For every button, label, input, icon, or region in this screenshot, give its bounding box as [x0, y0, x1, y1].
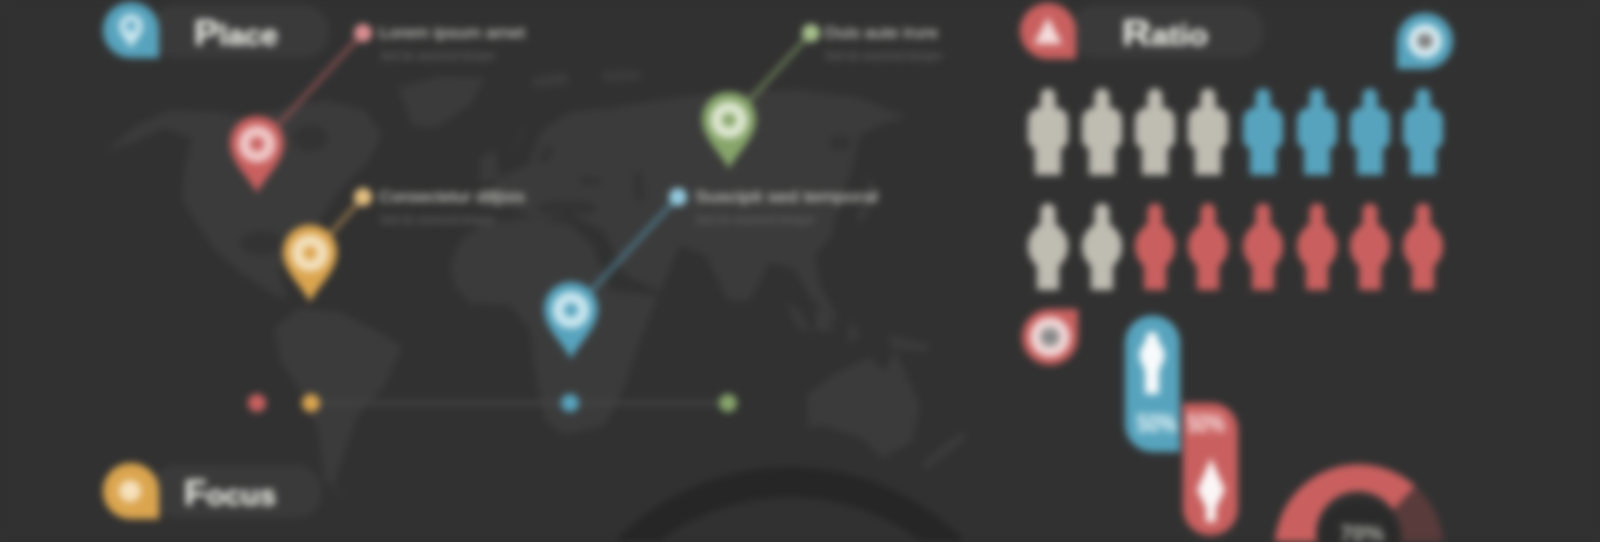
- map pin: [283, 225, 337, 302]
- map: South America: [274, 308, 402, 500]
- heading pill: [1070, 5, 1264, 58]
- people row: female: [1028, 204, 1443, 290]
- focus ring chart: [614, 467, 966, 542]
- red female figures: [1135, 204, 1443, 290]
- stat pill: female: [1183, 403, 1238, 536]
- map: North America: [106, 100, 382, 300]
- label: Sed do eiusmod tempor: [380, 48, 496, 63]
- pin group: red: [230, 24, 526, 193]
- pin group: green: [702, 24, 943, 169]
- map: Japan: [856, 175, 878, 222]
- connector line: [325, 197, 363, 240]
- heading pill: [150, 5, 329, 58]
- end dot: [802, 24, 820, 42]
- timeline dot: yellow: [302, 394, 320, 412]
- blue male figures: [1243, 88, 1443, 175]
- map pin: [230, 116, 284, 193]
- label: [825, 25, 943, 63]
- icon: red female bubble: [1022, 309, 1078, 365]
- donut centre: [1317, 500, 1401, 542]
- male figure: [1140, 332, 1164, 394]
- end dot: [354, 24, 372, 42]
- icon: blue male bubble: 50: [1419, 36, 1431, 48]
- label: Sed do eiusmod tempor: [825, 48, 943, 63]
- heading: Ratio: [1020, 3, 1264, 59]
- label: [379, 25, 526, 63]
- map pin: [702, 92, 756, 169]
- end dot: [354, 188, 372, 206]
- label: Sed do eiusmod tempor: [695, 212, 816, 227]
- icon: yellow focus bubble: [103, 463, 159, 519]
- neutral male figures: [1028, 88, 1228, 175]
- pin group: yellow: [283, 188, 525, 302]
- icon: blue location bubble: [103, 2, 159, 58]
- map: inland seas: [240, 125, 851, 255]
- end dot: [669, 188, 687, 206]
- timeline: [248, 394, 737, 412]
- icon: red person bubble: [1020, 3, 1076, 59]
- timeline dot: red: [248, 394, 266, 412]
- neutral female figures: [1028, 204, 1122, 290]
- heading pill: [150, 465, 322, 518]
- timeline dot: blue: [561, 394, 579, 412]
- map: New Zealand: [922, 432, 967, 470]
- female figure: [1197, 458, 1225, 522]
- label: Lorem ipsum amet: [379, 25, 526, 42]
- heading: Focus: [103, 463, 322, 519]
- map: Africa: [450, 218, 658, 435]
- label: Duis aute irure: [825, 25, 938, 42]
- donut chart: [1275, 464, 1443, 542]
- people row: male: [1028, 88, 1443, 175]
- map: Indonesia and New Guinea: [785, 300, 930, 352]
- donut value: [1275, 464, 1415, 542]
- stat pill: male: [1125, 316, 1180, 452]
- label: [695, 189, 878, 227]
- percentage: 50%: [1137, 408, 1177, 438]
- map pin: [544, 282, 598, 359]
- map: Eurasia: [482, 90, 907, 322]
- heading text: Place: [194, 12, 278, 53]
- heading text: Ratio: [1122, 12, 1208, 53]
- label: Sed do eiusmod tempor: [380, 212, 496, 227]
- heading: Place: [103, 2, 329, 58]
- map: United Kingdom: [480, 150, 500, 182]
- map: Greenland: [398, 76, 485, 128]
- map: Australia: [807, 350, 920, 458]
- connector line: [590, 197, 678, 292]
- donut remainder: [1393, 486, 1443, 542]
- icon: red female bubble: 50: [1044, 332, 1056, 344]
- label: Suscipit sed temporal: [695, 189, 878, 206]
- heading text: Focus: [184, 472, 276, 513]
- label: [379, 189, 525, 227]
- icon: blue male bubble: [1397, 13, 1453, 69]
- connector line: [278, 33, 363, 125]
- label: Consectetur dilljisis: [379, 189, 525, 206]
- percentage: 50%: [1187, 408, 1225, 438]
- timeline dot: green: [719, 394, 737, 412]
- world map: [106, 70, 967, 500]
- connector line: [745, 33, 811, 105]
- pin group: blue: [544, 188, 878, 359]
- map: arctic islands: [530, 70, 640, 88]
